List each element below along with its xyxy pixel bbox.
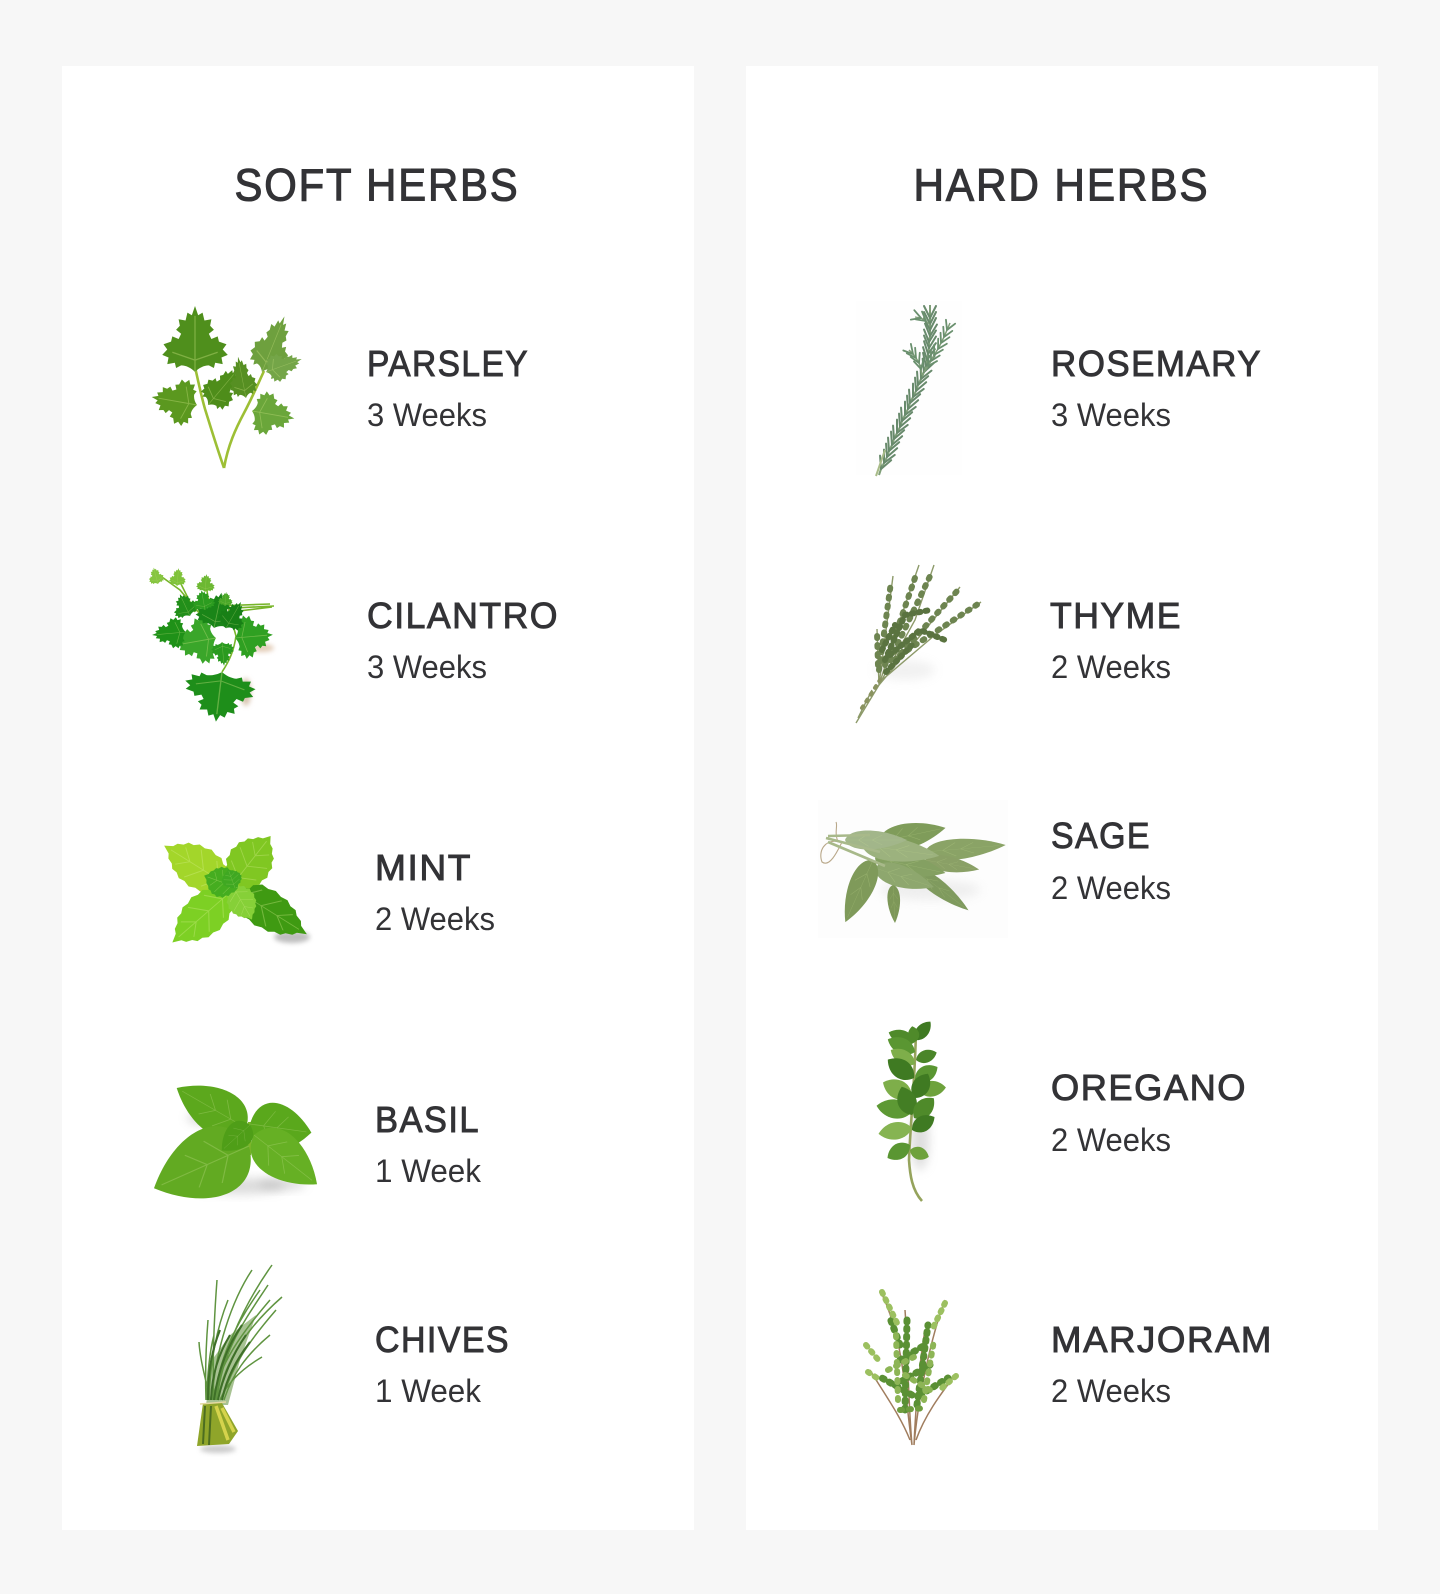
duration: sage: 2 Weeks <box>1051 870 1171 906</box>
duration: mint: 2 Weeks <box>375 901 495 937</box>
label: mint: MINT <box>375 847 472 888</box>
duration: oregano: 2 Weeks <box>1051 1122 1171 1158</box>
label: sage: SAGE <box>1051 815 1151 856</box>
label: chives: CHIVES <box>375 1319 510 1360</box>
duration: thyme: 2 Weeks <box>1051 649 1171 685</box>
icon: mint <box>153 822 318 959</box>
label: marjoram: MARJORAM <box>1051 1319 1273 1360</box>
item: marjoram <box>866 1290 1273 1445</box>
icon: thyme <box>856 565 981 723</box>
duration: marjoram: 2 Weeks <box>1051 1373 1171 1409</box>
icon: cilantro <box>146 566 275 726</box>
label: rosemary: ROSEMARY <box>1051 343 1262 384</box>
duration: cilantro: 3 Weeks <box>367 649 487 685</box>
icon: basil <box>140 1068 331 1220</box>
label: cilantro: CILANTRO <box>367 595 559 636</box>
icon: marjoram <box>866 1290 956 1445</box>
label: parsley: PARSLEY <box>367 343 529 384</box>
duration: chives: 1 Week <box>375 1373 482 1409</box>
label: thyme: THYME <box>1050 595 1182 636</box>
item: cilantro <box>146 566 559 726</box>
item: sage <box>818 800 1171 938</box>
item: mint <box>153 822 495 959</box>
item: parsley <box>148 306 529 468</box>
icon: sage <box>818 800 1008 938</box>
item: chives <box>197 1265 510 1453</box>
icon: rosemary <box>856 301 962 476</box>
heading: soft herbs: SOFT HERBS <box>234 160 520 210</box>
label: basil: BASIL <box>375 1099 480 1140</box>
item: oregano <box>875 1018 1247 1201</box>
panel: soft herbs <box>62 66 694 1530</box>
duration: rosemary: 3 Weeks <box>1051 397 1171 433</box>
item: thyme <box>856 565 1182 723</box>
heading: hard herbs: HARD HERBS <box>914 160 1210 210</box>
item: rosemary <box>856 301 1262 476</box>
duration: parsley: 3 Weeks <box>367 397 487 433</box>
label: oregano: OREGANO <box>1051 1067 1247 1108</box>
item: basil <box>140 1068 482 1220</box>
icon: chives <box>197 1265 282 1453</box>
icon: parsley <box>148 306 307 468</box>
icon: oregano <box>875 1018 947 1201</box>
duration: basil: 1 Week <box>375 1153 482 1189</box>
panel: hard herbs <box>746 66 1378 1530</box>
